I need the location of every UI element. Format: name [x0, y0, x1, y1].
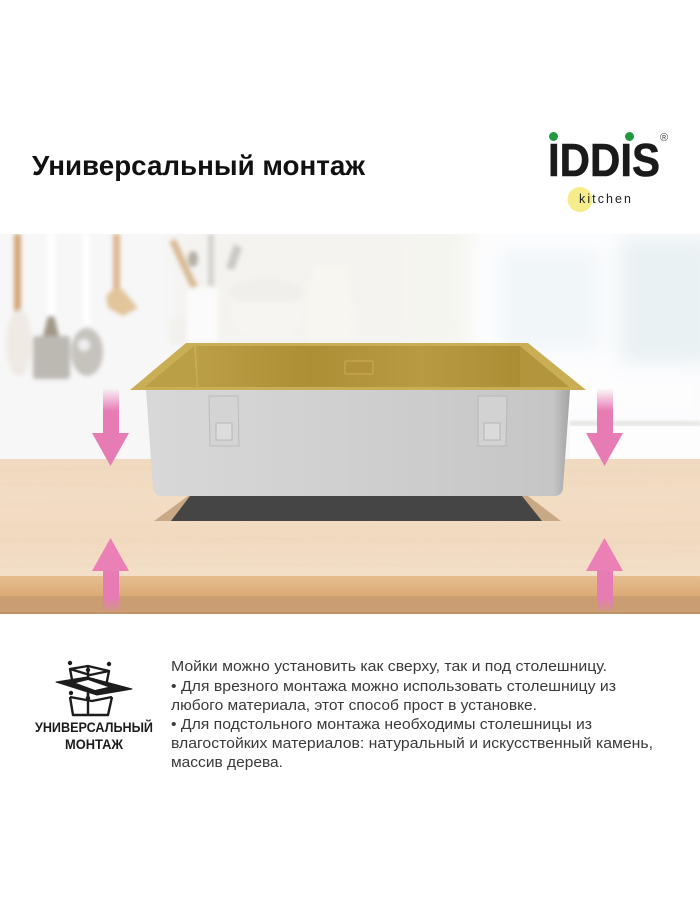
- description text: влагостойких материалов: натуральный и искусственный камень,: [171, 735, 653, 752]
- logo: IDDIS kitchen: [548, 132, 668, 212]
- cut-out raw edge: [154, 496, 561, 521]
- icon pins: [68, 661, 111, 700]
- countertop lower shadow band: [0, 596, 700, 612]
- description text: • Для врезного монтажа можно использовать столешницу из: [171, 678, 616, 695]
- title: Универсальный монтаж: [32, 150, 366, 181]
- icon caption: [35, 720, 153, 752]
- cut-out dark opening: [171, 496, 542, 521]
- arrow: left down: [92, 388, 129, 466]
- logo wordmark: IDDIS: [548, 134, 660, 186]
- icon caption: МОНТАЖ: [65, 737, 124, 752]
- arrow: right up: [586, 538, 623, 611]
- countertop slab: [56, 677, 132, 695]
- logo green dots: [549, 132, 634, 141]
- description text: • Для подстольного монтажа необходимы столешницы из: [171, 716, 592, 733]
- countertop front edge: [0, 576, 700, 596]
- left clamp: [209, 396, 239, 446]
- icon caption: УНИВЕРСАЛЬНЫЙ: [35, 720, 153, 735]
- arrow: right down: [586, 388, 623, 466]
- sink overflow plate: [345, 361, 373, 374]
- kitchen photo scene: [0, 225, 700, 614]
- sink left inner wall: [145, 346, 197, 387]
- arrow: left up: [92, 538, 129, 611]
- description text: любого материала, этот способ прост в установке.: [171, 697, 537, 714]
- logo registered mark: ®: [660, 132, 668, 144]
- description text: [171, 658, 653, 771]
- sink inner back wall: [196, 346, 520, 387]
- upper sink outline: [70, 666, 109, 696]
- window sill: [570, 421, 700, 426]
- sink rim: [130, 343, 586, 390]
- wooden countertop surface: [0, 459, 700, 577]
- description text: Мойки можно установить как сверху, так и под столешницу.: [171, 658, 607, 675]
- wood grain: [0, 468, 700, 568]
- description text: массив дерева.: [171, 754, 283, 771]
- logo yellow circle: [568, 187, 592, 212]
- sink right inner wall: [520, 346, 569, 387]
- logo kitchen label: kitchen: [579, 192, 631, 206]
- right clamp: [478, 396, 507, 446]
- lower sink outline: [70, 693, 112, 715]
- blurred utensils and tableware: [6, 234, 243, 382]
- icon: universal mounting: [56, 661, 132, 715]
- sink body: [146, 390, 570, 496]
- bright window area: [403, 238, 700, 357]
- background wall: [0, 234, 700, 460]
- sink: [130, 343, 586, 496]
